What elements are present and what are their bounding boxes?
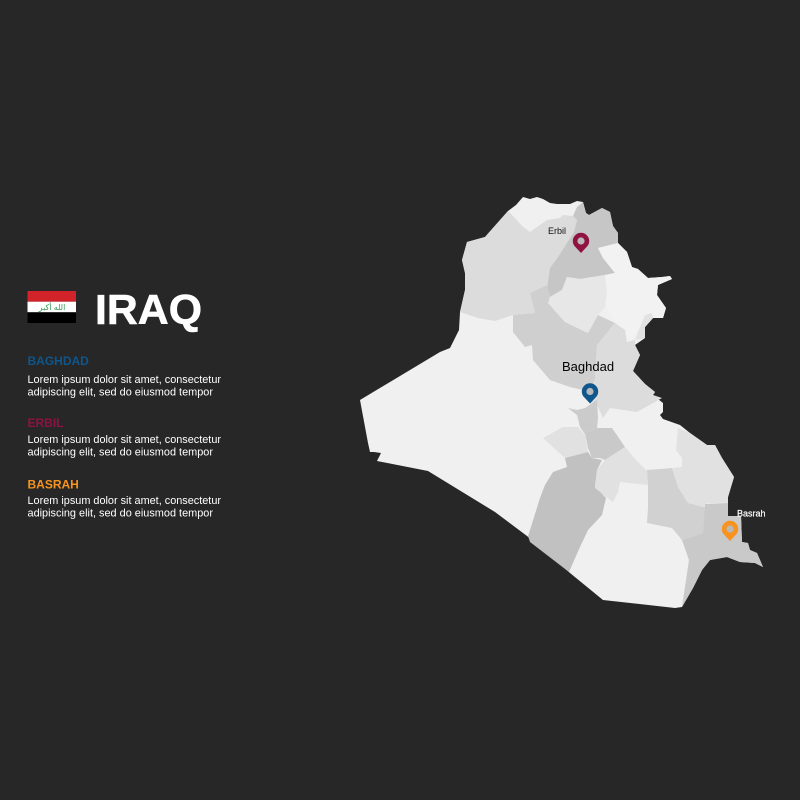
- icon: Baghdad pin: [582, 383, 598, 404]
- text block: Erbil: ERBIL: [28, 416, 64, 430]
- region: Kirkuk: [548, 275, 607, 333]
- label: Basrah: Basrah: [737, 508, 766, 518]
- region: Maysan: [672, 428, 734, 507]
- text block: Basrah: [28, 478, 221, 520]
- region: Baghdad: [568, 400, 598, 434]
- title: IRAQ: [95, 286, 202, 333]
- text block: Erbil: [28, 416, 221, 458]
- region: Diyala: [590, 323, 662, 418]
- region: Najaf: [528, 452, 606, 572]
- map of Iraq: [360, 197, 766, 608]
- region: Karbala: [543, 427, 588, 458]
- icon: Erbil pin: [573, 233, 589, 253]
- text block: Baghdad: [28, 354, 221, 398]
- text block: Basrah: BASRAH: [28, 478, 79, 492]
- text block: Baghdad: adipiscing elit, sed do eiusmod tempor: [28, 386, 213, 398]
- region: Nineveh: [460, 211, 577, 321]
- text block: Baghdad: BAGHDAD: [28, 354, 89, 368]
- region: Erbil and Dahuk: [547, 202, 618, 297]
- text block: Erbil: Lorem ipsum dolor sit amet, consectetur: [28, 434, 221, 446]
- icon: flag of Iraq: الله أكبر: [38, 302, 65, 312]
- label: Erbil: Erbil: [548, 226, 566, 236]
- region: Basra: [682, 503, 763, 607]
- text block: Erbil: adipiscing elit, sed do eiusmod tempor: [28, 446, 213, 458]
- text block: Basrah: Lorem ipsum dolor sit amet, consectetur: [28, 495, 221, 507]
- region: Diyala strip: [635, 313, 653, 340]
- region: Salah ad Din and Anbar border: [513, 285, 615, 390]
- region: Dhi Qar: [647, 468, 705, 540]
- icon: Basrah pin: [722, 521, 738, 541]
- region: Sulaymaniyah: [598, 243, 672, 342]
- label: Baghdad: Baghdad: [562, 359, 614, 374]
- region: Qadisiyyah: [595, 447, 648, 502]
- region: Babil: [585, 428, 625, 460]
- text block: Baghdad: Lorem ipsum dolor sit amet, consectetur: [28, 374, 221, 386]
- region: country outline and western desert: [360, 197, 763, 608]
- panel: left text column: [28, 286, 221, 520]
- text block: Basrah: adipiscing elit, sed do eiusmod tempor: [28, 508, 213, 520]
- icon: flag of Iraq: [28, 291, 76, 323]
